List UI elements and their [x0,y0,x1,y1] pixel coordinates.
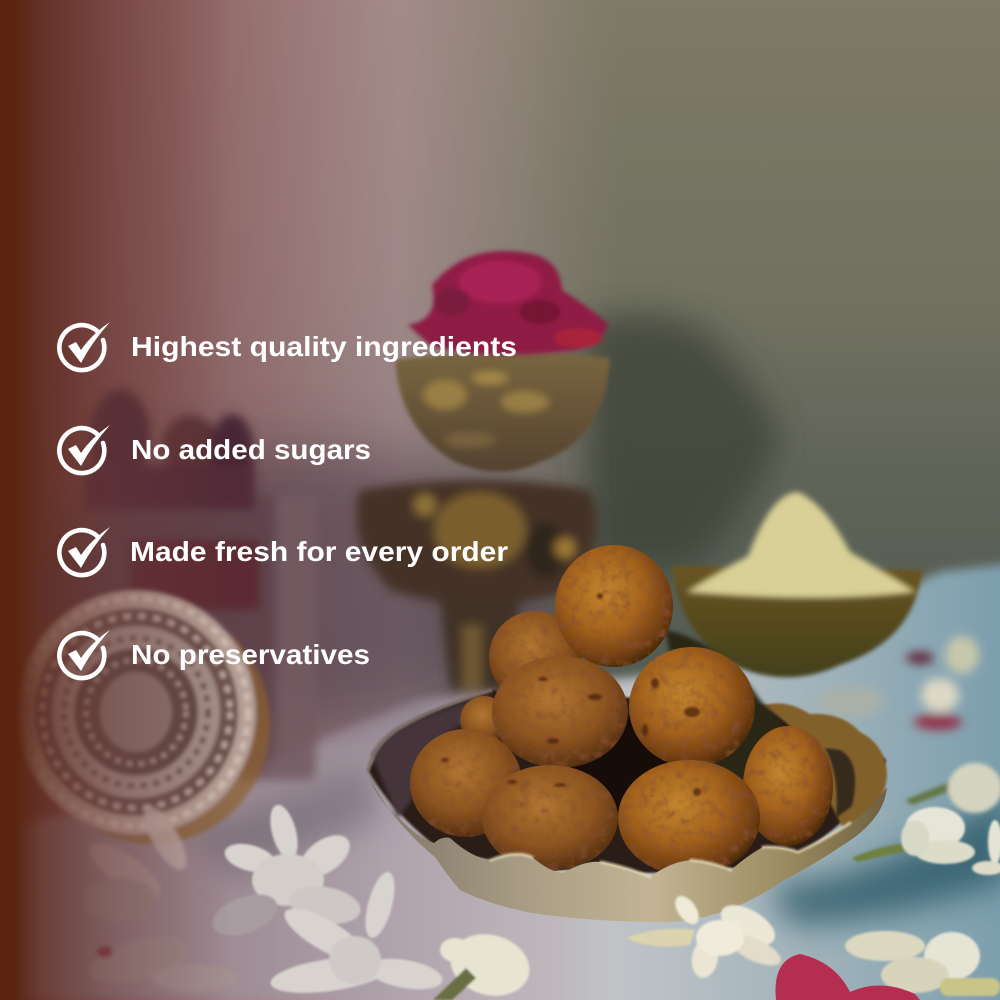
icon: check circle [59,325,104,370]
benefit row: no added sugars [59,425,371,473]
rose petals [408,251,608,355]
table tone correction [0,690,560,1000]
gold bowl [395,352,610,472]
laddu: dark back right [665,630,800,800]
bowl back rim [762,703,887,832]
laddu dark gap [570,715,710,825]
laddu: centre left [492,656,628,768]
brass stand [356,480,597,690]
benefit row: no preservatives [59,630,370,678]
bowl rim highlight [491,823,850,877]
label: No added sugars [131,434,371,465]
laddu: back left [489,611,581,703]
flower right edge [972,820,1000,875]
photo background: table [0,560,1000,1000]
laddu: right middle [629,647,755,767]
table shadow right [770,790,1000,925]
bowl front rim [367,773,887,922]
table shadows left [190,760,380,880]
jar of dates [85,389,316,780]
left brown edge overlay [0,0,230,1000]
icon: check circle [59,428,104,473]
laddu: bottom left [482,765,618,871]
laddu: bottom middle [618,760,760,876]
benefit row: highest quality [59,322,517,370]
flower bottom centre [433,926,536,1000]
seal disc [16,590,270,844]
foreground flowers left [207,802,445,999]
laddu: top [555,545,673,667]
laddu: right low [743,726,833,846]
laddu dark flecks [441,593,701,796]
icon: tick [68,527,110,568]
flower right top [905,763,1000,813]
wall shadow of bowls [585,314,779,570]
flower under bowl [626,892,785,980]
bowl of laddus [367,545,887,922]
benefit row: made fresh [59,527,508,575]
right bowl of powder [672,492,922,677]
dark lower wall haze [30,450,570,730]
icon: check circle [59,633,104,678]
label: No preservatives [131,639,370,670]
rose petal bottom [776,954,920,1000]
icon: tick [68,425,110,466]
bowl left interior [372,692,492,818]
icon: check circle [59,530,104,575]
foreground flowers far left [82,800,239,993]
bowl interior [368,690,886,873]
laddu: left low [410,729,522,837]
icon: tick [68,322,110,363]
flower bottom right [845,931,1000,996]
label: Made fresh for every order [130,536,508,567]
blurred table flowers far [816,636,979,730]
icon: tick [68,630,110,671]
bowl left rim [368,690,492,772]
laddu: back tiny [460,696,508,744]
label: Highest quality ingredients [131,331,517,362]
flower right middle [852,807,975,864]
